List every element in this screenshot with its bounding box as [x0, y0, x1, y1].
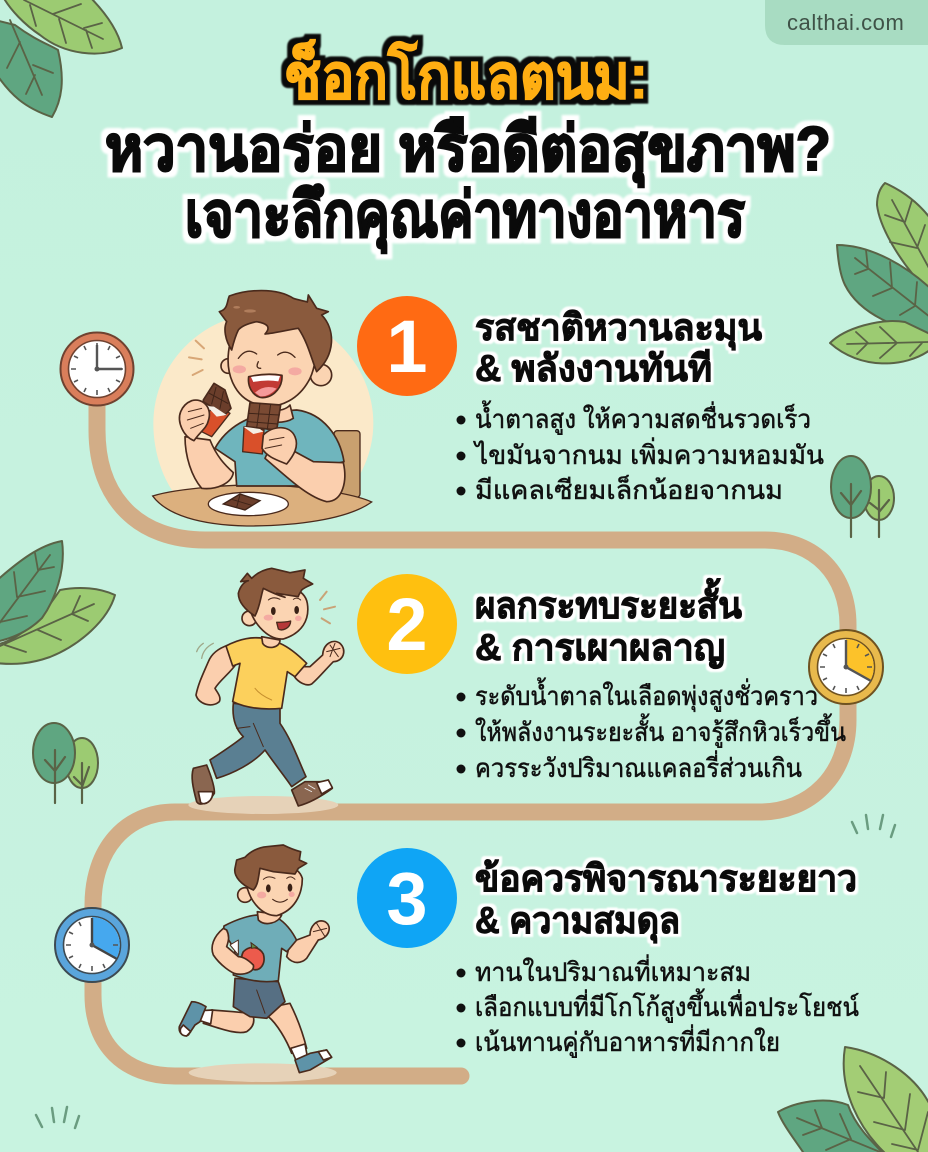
leaves: top left	[0, 0, 122, 117]
title: เจาะลึกคุณค่าทางอาหาร	[185, 181, 745, 253]
title: ช็อกโกแลตนม:	[284, 39, 648, 112]
heading 3: ข้อควรพิจารณาระยะยาว	[475, 858, 857, 899]
leaves: bottom right	[778, 1047, 928, 1152]
bullets 1: มีแคลเซียมเล็กน้อยจากนม	[475, 474, 783, 505]
bullets 3: เลือกแบบที่มีโกโก้สูงขึ้นเพื่อประโยชน์	[475, 988, 859, 1023]
badge 1: 1	[386, 305, 428, 388]
bullets 2	[456, 677, 846, 783]
winding path	[93, 400, 848, 1076]
badge 3: 3	[386, 857, 428, 940]
bullets 3: ทานในปริมาณที่เหมาะสม	[475, 954, 751, 987]
leaves: top right	[830, 183, 928, 363]
illustration: boy eating chocolate	[153, 291, 373, 526]
bullets 2: ควรระวังปริมาณแคลอรี่ส่วนเกิน	[475, 750, 802, 783]
badge 1	[357, 296, 457, 396]
trees: left	[33, 723, 98, 803]
heading 1: รสชาติหวานละมุน	[475, 307, 762, 351]
section 2	[357, 574, 846, 783]
illustration: boy running with apple	[179, 845, 337, 1082]
heading 1: & พลังงานทันที	[475, 348, 712, 389]
grass tufts	[36, 815, 895, 1128]
heading 3	[475, 858, 857, 944]
section 3	[357, 848, 859, 1058]
heading 1	[475, 307, 762, 389]
bullets 2: ให้พลังงานระยะสั้น อาจรู้สึกหิวเร็วขึ้น	[475, 713, 846, 748]
bullets 1	[456, 400, 824, 505]
heading 3: & ความสมดุล	[475, 900, 680, 944]
bullets 1: น้ำตาลสูง ให้ความสดชื่นรวดเร็ว	[475, 400, 811, 435]
clock 1	[60, 332, 134, 406]
title	[105, 39, 831, 253]
clock 2	[809, 630, 883, 704]
illustration: boy jogging in yellow shirt	[188, 568, 344, 814]
leaves: left middle	[0, 541, 115, 664]
clock 3	[55, 908, 129, 982]
brand tab: calthai.com	[787, 10, 904, 35]
heading 2	[475, 578, 742, 669]
badge 2: 2	[386, 583, 428, 666]
section 1	[357, 296, 824, 505]
badge 2	[357, 574, 457, 674]
bullets 3: เน้นทานคู่กับอาหารที่มีกากใย	[475, 1024, 780, 1058]
bullets 1: ไขมันจากนม เพิ่มความหอมมัน	[473, 437, 824, 470]
trees: right	[831, 456, 894, 537]
title: หวานอร่อย หรือดีต่อสุขภาพ?	[105, 115, 831, 187]
brand tab	[765, 0, 928, 45]
heading 2: & การเผาผลาญ	[475, 627, 725, 669]
bullets 3	[456, 954, 859, 1058]
badge 3	[357, 848, 457, 948]
bullets 2: ระดับน้ำตาลในเลือดพุ่งสูงชั่วคราว	[475, 677, 818, 712]
heading 2: ผลกระทบระยะสั้น	[475, 578, 742, 626]
